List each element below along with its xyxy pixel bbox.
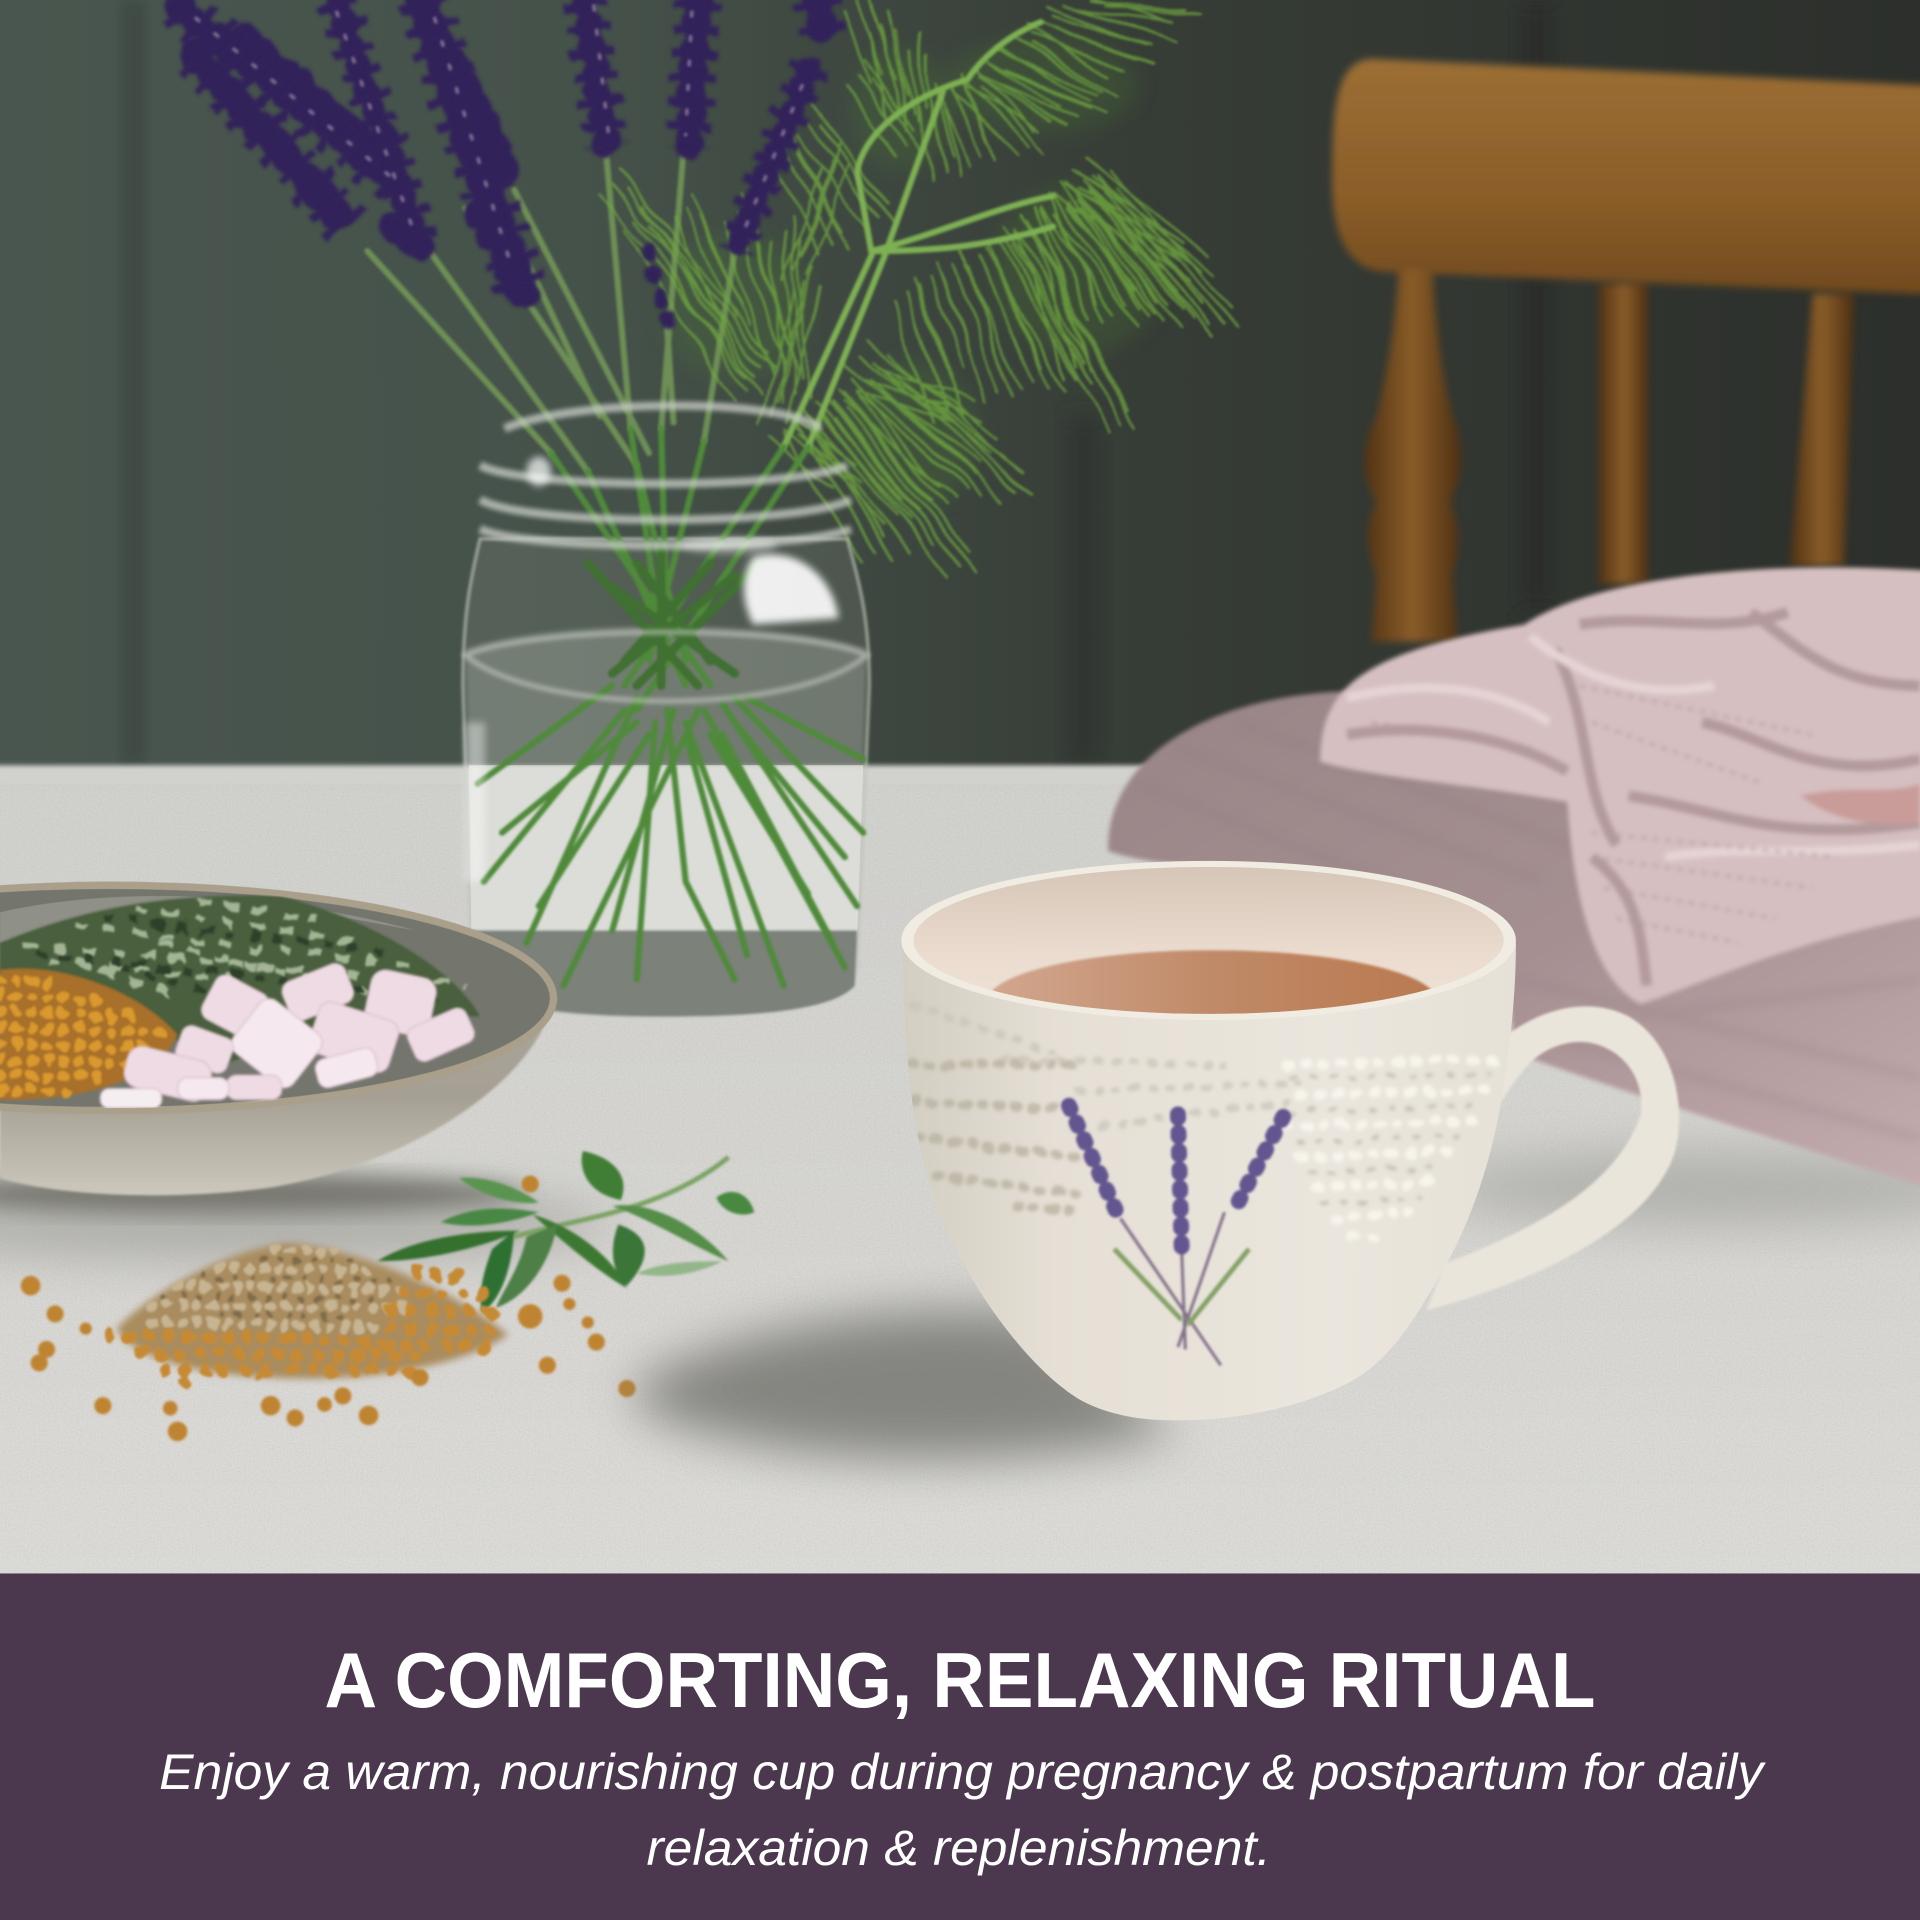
fennel frond mass <box>661 37 1163 508</box>
banner heading: A COMFORTING, RELAXING RITUAL <box>324 1636 1596 1724</box>
herb sprig <box>377 1151 754 1313</box>
tea cup <box>901 861 1679 1420</box>
cup embossed texture <box>912 1004 1500 1237</box>
wall background <box>0 0 1920 784</box>
tea surface <box>991 948 1432 1014</box>
lavender flower spike core <box>178 0 823 324</box>
lavender flower tips <box>196 6 802 276</box>
water in jar <box>465 626 867 765</box>
lavender sprigs <box>178 0 823 324</box>
bottom banner <box>0 1573 1920 1920</box>
lavender floret whorls <box>178 0 823 288</box>
bowl contents <box>0 896 480 1108</box>
banner subheading line 1: Enjoy a warm, nourishing cup during pregnancy & postpartum for daily <box>159 1744 1766 1800</box>
bowl outer body <box>0 998 553 1195</box>
lavender decoration on cup <box>1069 1106 1283 1365</box>
herb: golden fenugreek <box>0 968 178 1100</box>
fennel fronds <box>600 0 1239 579</box>
lavender stems <box>1120 1212 1224 1365</box>
table surface <box>0 765 1920 1604</box>
jar body <box>463 539 869 1016</box>
stems above jar <box>367 153 735 471</box>
bowl shadow <box>0 1174 527 1213</box>
mound light seeds <box>153 1249 410 1327</box>
blanket ribs <box>1139 722 1920 1139</box>
blanket: folded mauve <box>1108 686 1920 1206</box>
loose seeds <box>21 1176 636 1441</box>
stems in jar <box>478 429 863 986</box>
wooden chair <box>1332 59 1920 642</box>
cup interior <box>913 867 1504 1014</box>
glass jar <box>463 406 869 1016</box>
banner subheading line 2: relaxation & replenishment. <box>647 1820 1271 1876</box>
cup rim <box>901 861 1516 1020</box>
mound gold seeds <box>110 1273 508 1381</box>
jar threads <box>480 406 851 546</box>
bowl rim and interior <box>0 885 553 1111</box>
cup body <box>902 943 1516 1420</box>
bowl with herbs <box>0 885 553 1213</box>
herb: marshmallow pieces <box>100 960 477 1108</box>
scattered seed pile <box>21 1176 636 1441</box>
lavender leaves <box>1114 1249 1249 1325</box>
cup handle <box>1427 1006 1679 1310</box>
glass highlights <box>465 457 839 882</box>
lavender flower heads <box>1069 1106 1283 1247</box>
blankets <box>1108 567 1920 1206</box>
fennel feathery leaves <box>600 0 1239 579</box>
sprig leaves <box>377 1151 754 1313</box>
water surface <box>465 632 867 701</box>
blanket: pink muslin <box>1320 567 1920 1004</box>
seed mound <box>116 1243 508 1379</box>
herb: green leaves <box>0 896 480 1065</box>
cup cast shadow <box>637 1310 1176 1458</box>
fennel main stems <box>784 22 1053 447</box>
